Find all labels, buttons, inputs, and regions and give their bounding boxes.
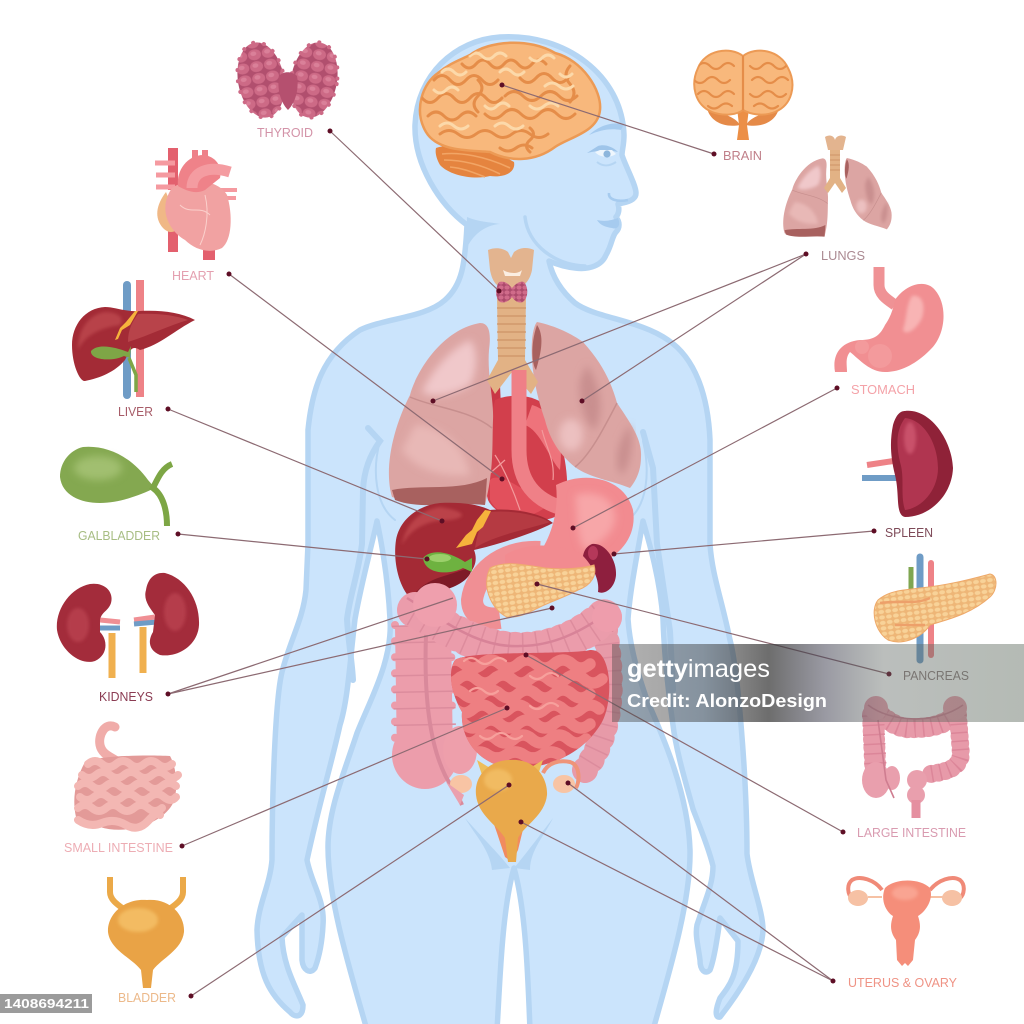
organ: small intestine in body (440, 650, 609, 768)
leader lines (166, 82, 892, 998)
icon: stomach (834, 267, 944, 372)
icon: lungs (783, 136, 892, 237)
icon: pancreas (874, 557, 996, 660)
organ: duodenum (472, 552, 540, 618)
icon: gallbladder (60, 447, 172, 526)
organ: lungs (389, 322, 641, 505)
icon: liver (72, 280, 195, 397)
icon: thyroid (232, 39, 343, 121)
label: spleen: SPLEEN (885, 525, 933, 540)
icon: large intestine (862, 696, 967, 818)
face: eye, eyebrow, nose and lips (587, 123, 628, 228)
label: uterus and ovary: UTERUS & OVARY (848, 975, 957, 990)
organ: brain (420, 43, 600, 178)
organ: thyroid in body (496, 282, 527, 303)
icon: kidneys (57, 573, 199, 678)
icon: brain front view (694, 51, 792, 140)
label: thyroid: THYROID (257, 125, 313, 140)
label: gallbladder: GALBLADDER (78, 528, 160, 543)
image id tag: 1408694211 (4, 996, 89, 1011)
organ: spleen in body (583, 544, 616, 593)
label: pancreas: PANCREAS (903, 668, 969, 683)
organ: pancreas in body (487, 564, 595, 617)
icon: spleen (862, 411, 953, 517)
organ: trachea and larynx (487, 248, 538, 394)
icon: uterus and ovaries (848, 878, 964, 966)
label: lungs: LUNGS (821, 248, 865, 263)
jaw and neck shading (347, 217, 673, 690)
icon: heart (155, 148, 237, 260)
body silhouette (257, 37, 763, 1024)
watermark band (612, 644, 1024, 722)
organ: gallbladder in body (423, 552, 472, 572)
organ: bladder in body (476, 760, 547, 862)
label: small intestine: SMALL INTESTINE (64, 840, 173, 855)
label: bladder: BLADDER (118, 990, 176, 1005)
organ: large intestine in body (392, 583, 622, 805)
organ: liver (395, 503, 553, 598)
icon: bladder (108, 877, 184, 988)
label: brain: BRAIN (723, 148, 762, 163)
organ: uterus and ovaries in body (446, 761, 578, 862)
label: stomach: STOMACH (851, 382, 915, 397)
label: large intestine: LARGE INTESTINE (857, 825, 966, 840)
organ: stomach (530, 478, 634, 572)
label: liver: LIVER (118, 404, 153, 419)
watermark logo text: gettyimages (627, 655, 770, 683)
icon: small intestine (74, 726, 178, 830)
watermark credit: Credit: AlonzoDesign (627, 691, 827, 711)
label: heart: HEART (172, 268, 214, 283)
organ: heart (485, 385, 567, 521)
label: kidneys: KIDNEYS (99, 689, 153, 704)
image id tag (0, 994, 92, 1013)
organ: esophagus (519, 370, 562, 508)
